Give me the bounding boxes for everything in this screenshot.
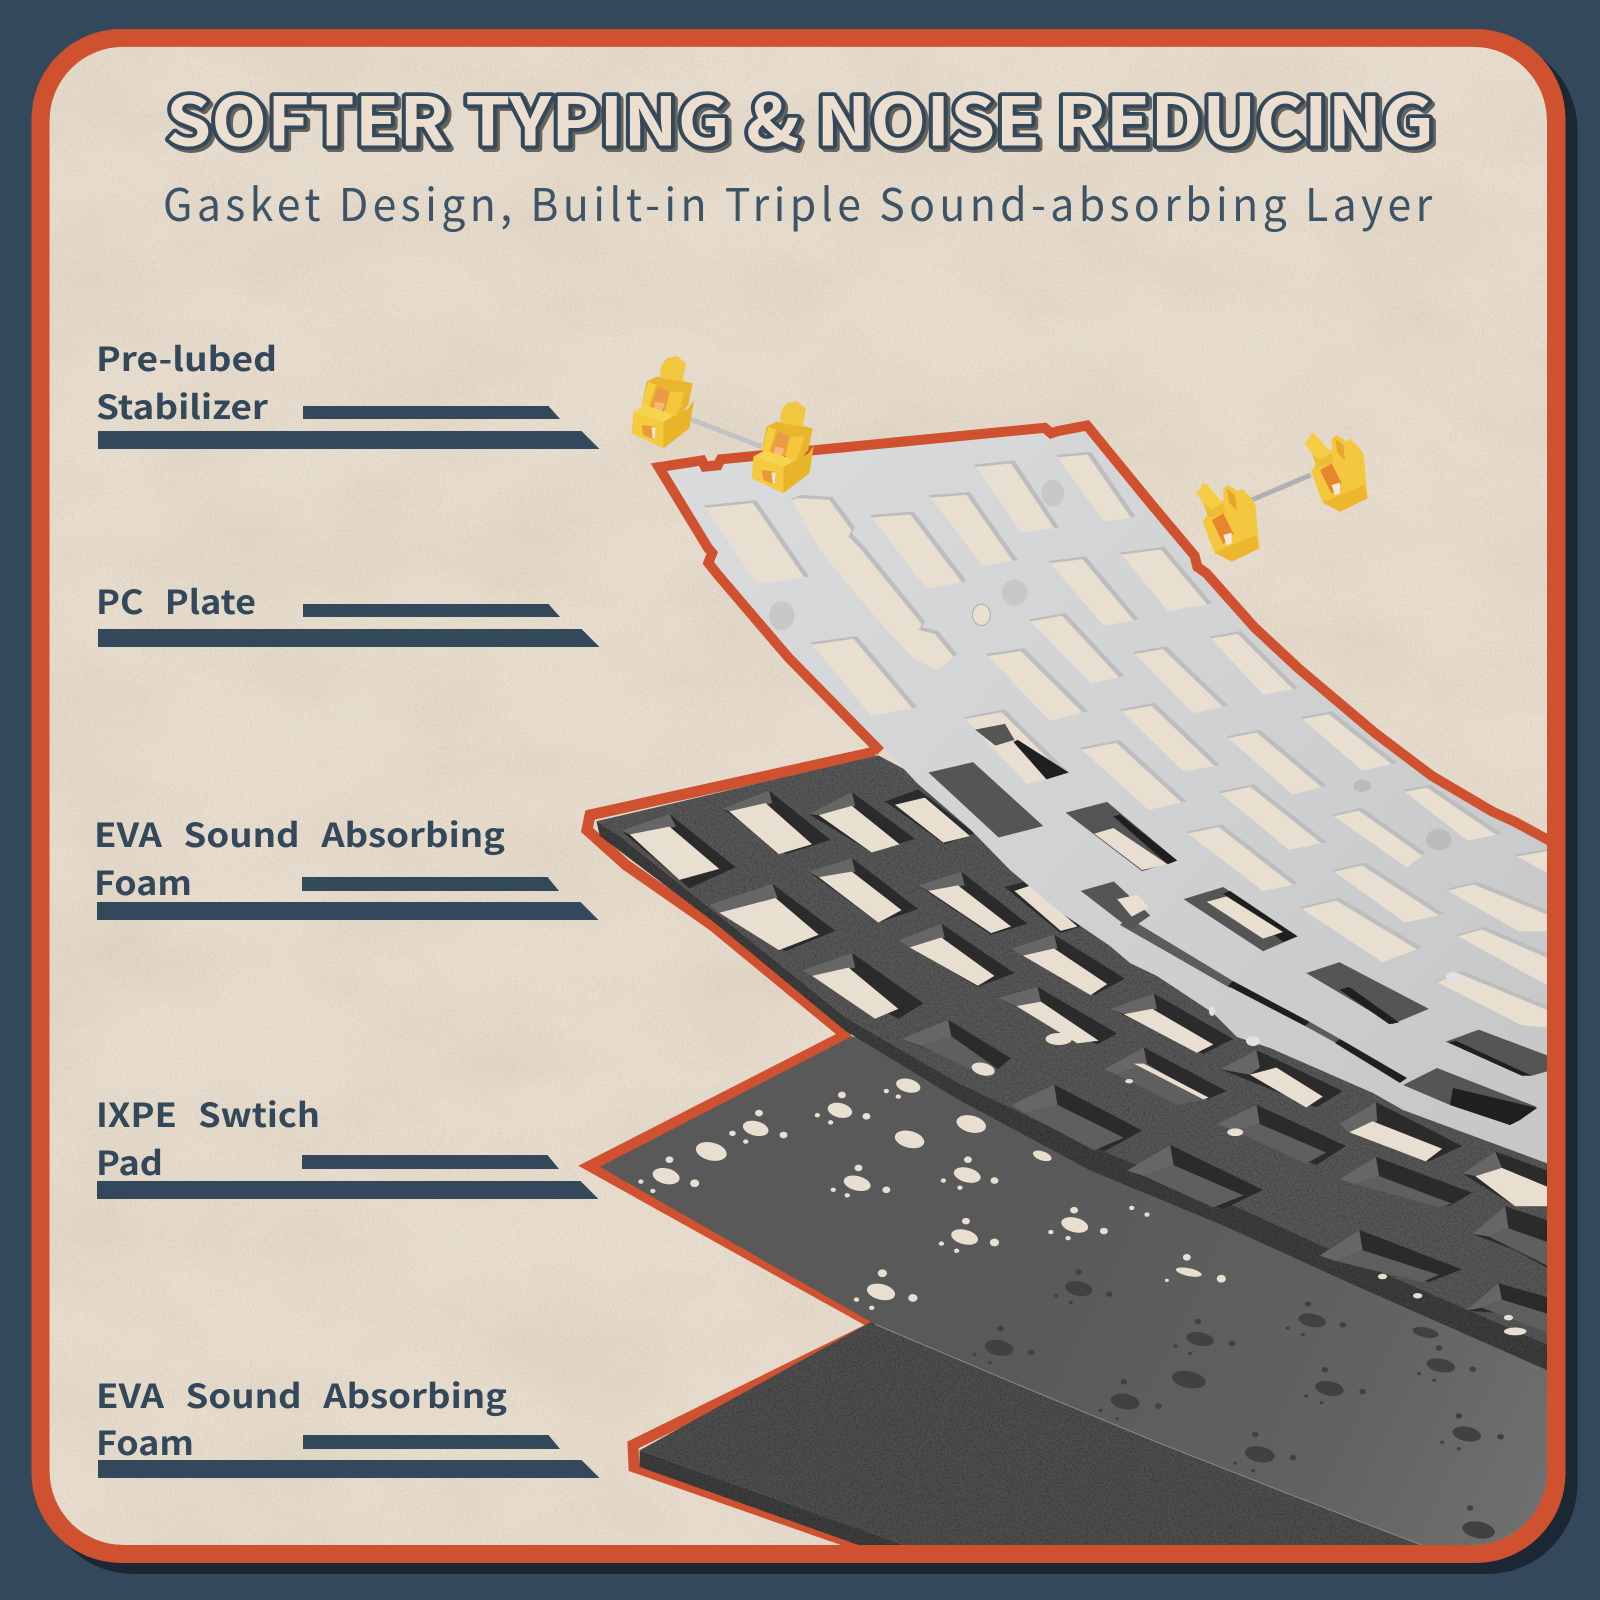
label: pre-lubed stabilizer: Stabilizer xyxy=(96,381,269,429)
plate dark openings upper xyxy=(769,480,1451,871)
title: SOFTER TYPING & NOISE REDUCING xyxy=(166,68,1434,166)
label: ixpe switch pad: IXPE Swtich xyxy=(96,1089,320,1137)
stabilizer housing 2 xyxy=(752,401,814,493)
label: eva sound absorbing foam bottom: EVA Sound Absorbing xyxy=(96,1370,507,1418)
stabilizer housing 3 xyxy=(1196,483,1259,562)
label: eva sound absorbing foam: Foam xyxy=(94,857,192,905)
label: eva sound absorbing foam bottom: Foam xyxy=(96,1417,194,1465)
eva foam layer with switch cutouts xyxy=(596,755,1555,1374)
label: ixpe switch pad xyxy=(96,1089,598,1199)
label: ixpe switch pad: Pad xyxy=(96,1137,163,1185)
label: pre-lubed stabilizer: Pre-lubed xyxy=(96,333,277,381)
orange outlines of layers xyxy=(587,431,1560,1550)
bottom eva foam layer xyxy=(640,1322,1449,1550)
plate pins xyxy=(1209,972,1460,1046)
label: pre-lubed stabilizer xyxy=(96,333,600,449)
foam windows xyxy=(621,789,1555,1335)
title: SOFTER TYPING & NOISE REDUCING xyxy=(169,72,1437,168)
label: pc plate: PC Plate xyxy=(96,576,256,624)
wire xyxy=(1252,475,1311,500)
plate switch cutouts xyxy=(704,452,1557,1028)
label: pc plate xyxy=(96,576,600,647)
foam side face xyxy=(596,821,1555,1374)
label: eva sound absorbing foam bottom xyxy=(96,1370,600,1478)
ixpe switch pad layer xyxy=(600,1030,1555,1574)
subtitle: Gasket Design, Built-in Triple Sound-absorbing Layer xyxy=(163,169,1433,234)
foam top face xyxy=(596,755,1555,1348)
label: eva sound absorbing foam: EVA Sound Absorbing xyxy=(94,809,505,857)
stabilizer pair right xyxy=(1196,433,1368,562)
dark perforations xyxy=(973,1269,1504,1541)
exploded keyboard layers xyxy=(587,356,1560,1574)
pc plate layer xyxy=(667,431,1560,1168)
label: eva sound absorbing foam xyxy=(94,809,598,920)
stabilizer pair left xyxy=(632,356,814,493)
beige perforations xyxy=(638,1030,1528,1339)
stabilizer housing 4 xyxy=(1304,433,1368,512)
plate arc gap xyxy=(1120,917,1407,1083)
stabilizer housing 1 xyxy=(632,356,694,448)
plate foam notch xyxy=(1403,1068,1537,1125)
wire xyxy=(688,418,762,447)
plate dark openings lower xyxy=(1081,882,1555,1076)
